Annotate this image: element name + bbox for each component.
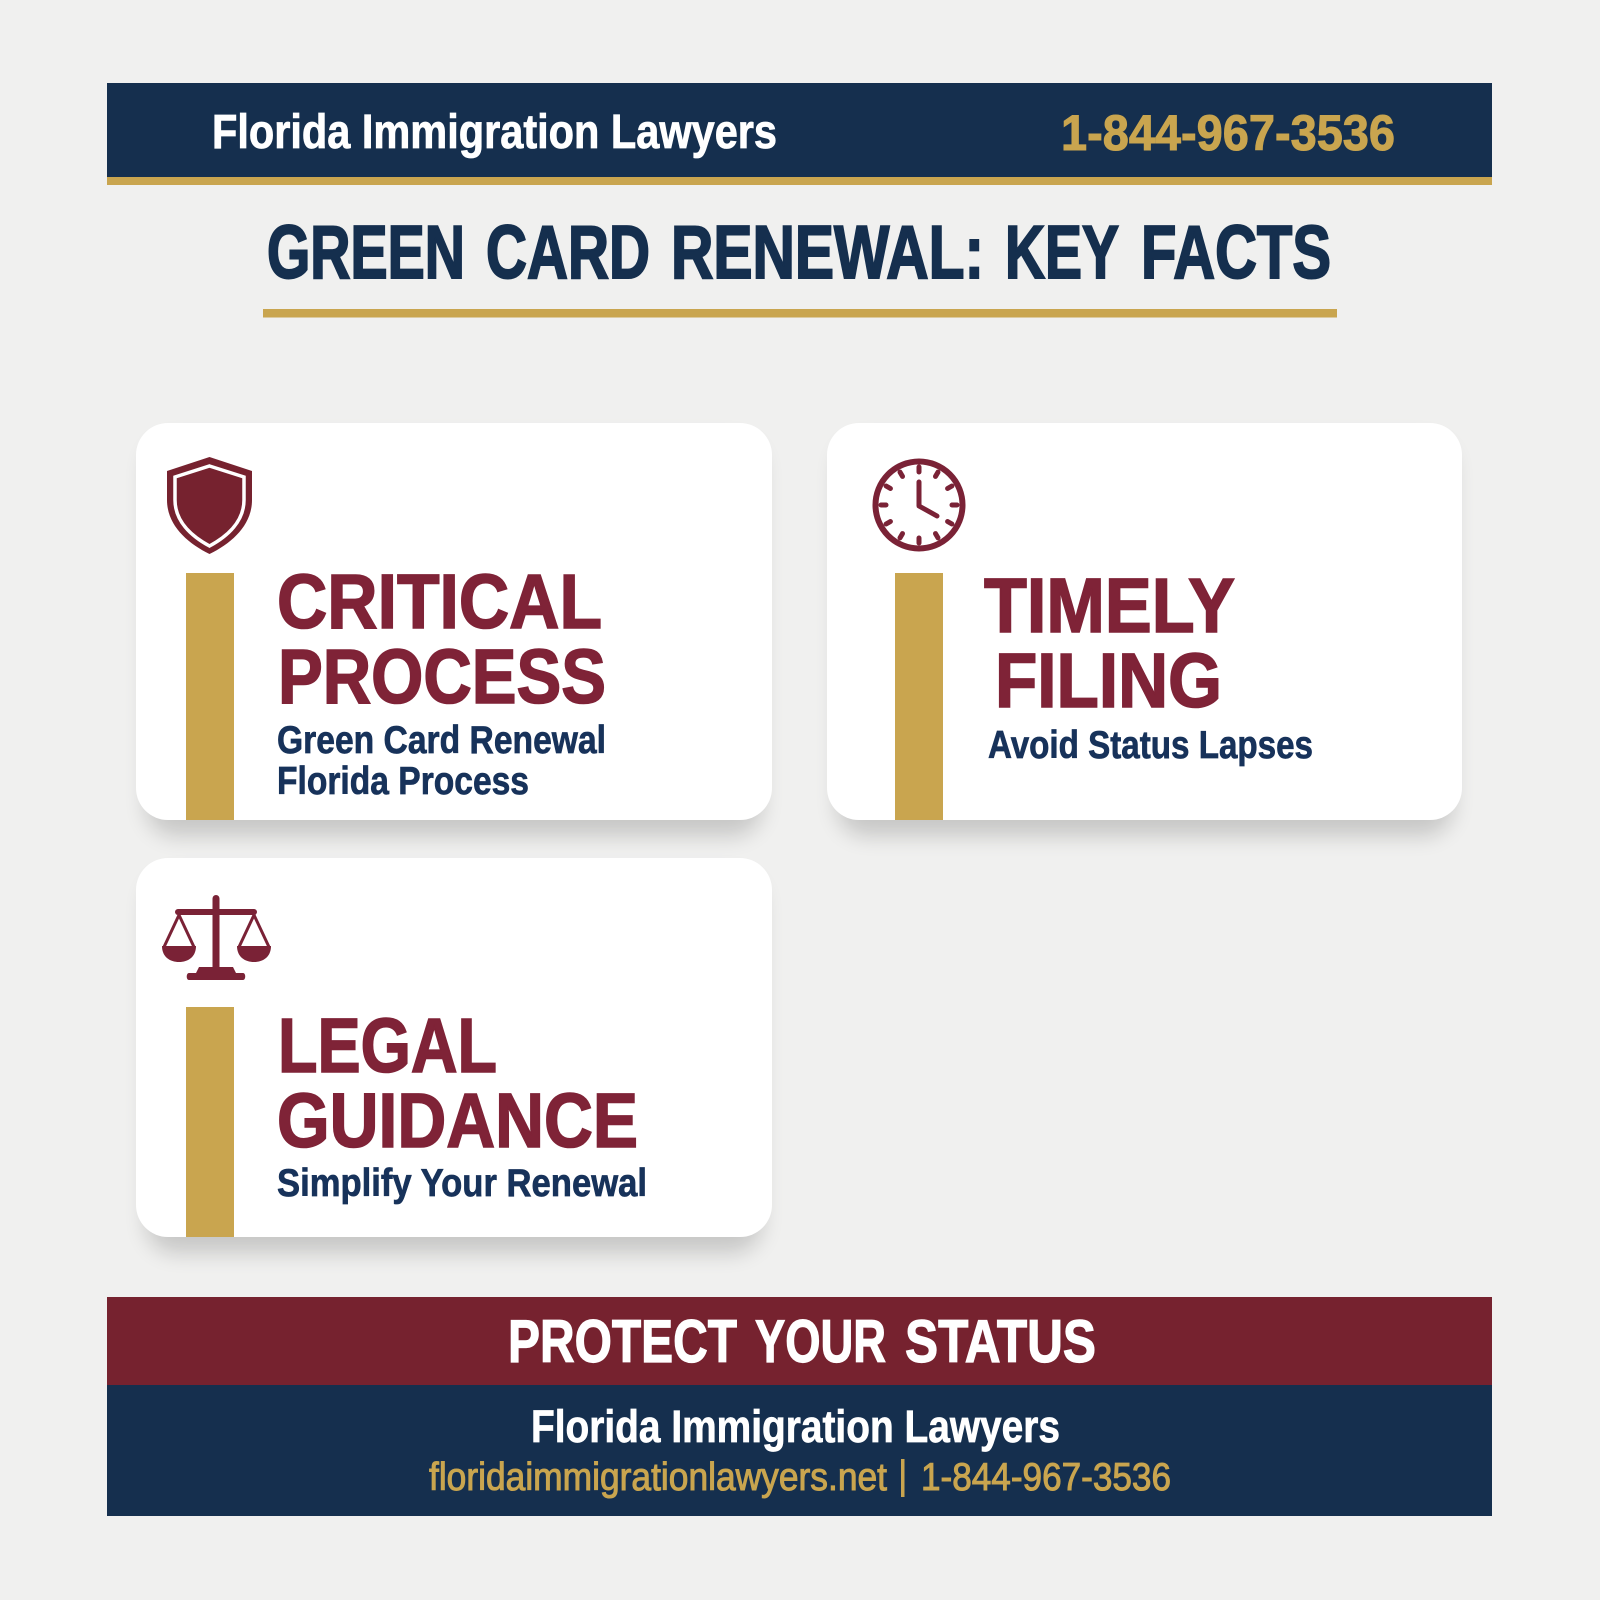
description: Avoid Status Lapses [988,724,1313,767]
footer call to action: PROTECT [508,1308,737,1375]
header banner [107,83,1492,185]
panel: timely filing [827,423,1462,836]
footer contact block [107,1385,1492,1516]
firm name: Florida Immigration Lawyers [531,1401,1060,1452]
heading [277,559,606,720]
heading: GUIDANCE [277,1078,638,1164]
footer call to action: STATUS [905,1308,1096,1375]
title: CARD [486,210,650,294]
panel: critical process [136,423,772,836]
footer call to action: YOUR [755,1308,886,1375]
title: FACTS [1141,210,1331,294]
description [277,719,606,803]
description: Green Card Renewal [277,719,606,762]
title [263,210,1337,318]
footer call to action [107,1297,1492,1385]
title: GREEN [267,210,465,294]
icon: clock [876,462,962,548]
website and phone: 1-844-967-3536 [921,1456,1171,1499]
description: Simplify Your Renewal [277,1162,647,1205]
website and phone: floridaimmigrationlawyers.net [429,1456,887,1499]
gold bar [186,1007,234,1237]
icon: shield [167,457,252,554]
heading: LEGAL [278,1003,497,1089]
phone number: 1-844-967-3536 [1061,105,1395,161]
title: KEY [1005,210,1119,294]
heading [984,563,1235,724]
firm name: Florida Immigration Lawyers [212,106,777,159]
panel: legal guidance [136,858,772,1253]
heading: FILING [995,638,1222,724]
description: Florida Process [277,760,529,803]
gold bar [895,573,943,820]
heading: CRITICAL [277,559,602,645]
icon: scales [162,895,271,980]
website and phone [429,1456,1171,1499]
gold bar [186,573,234,820]
heading [277,1003,638,1164]
heading: TIMELY [984,563,1235,649]
title: RENEWAL: [671,210,984,294]
heading: PROCESS [278,634,606,720]
